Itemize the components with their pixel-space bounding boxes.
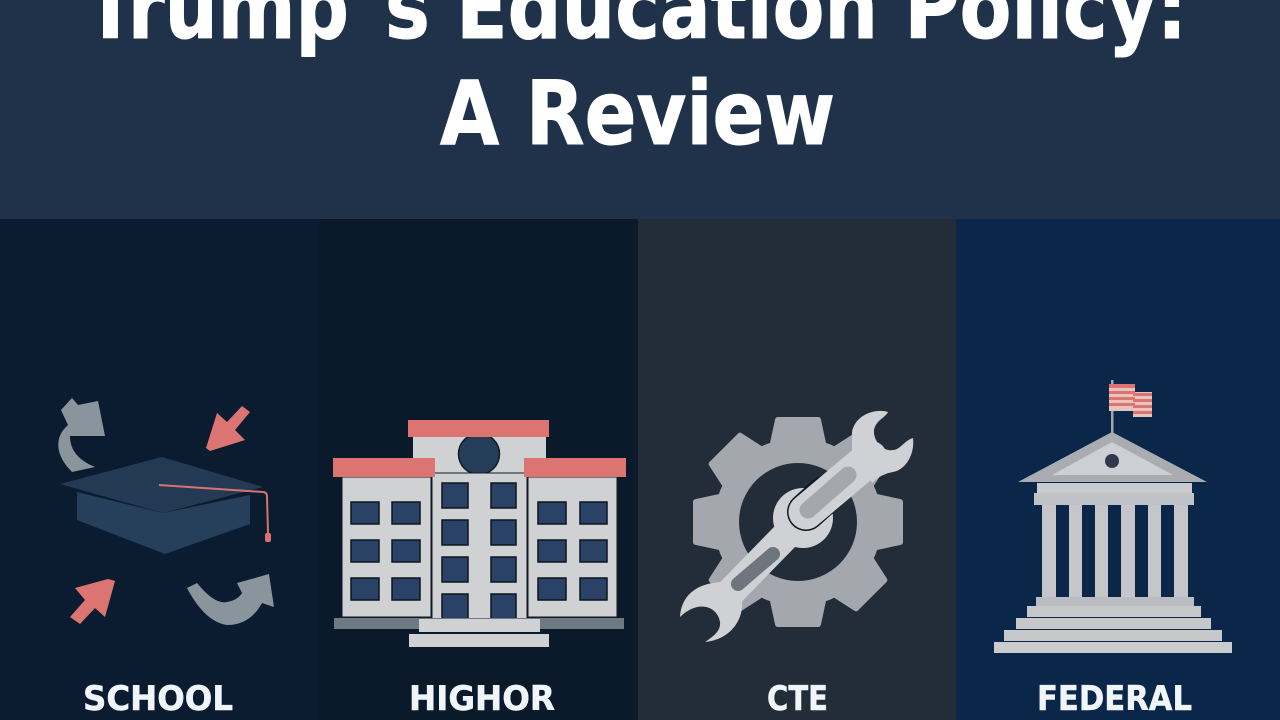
icon: university building bbox=[333, 420, 626, 647]
icon: government building bbox=[994, 432, 1232, 653]
panel: career and technical education bbox=[638, 219, 956, 720]
panel: higher education bbox=[319, 219, 638, 720]
icon: gray curved arrow bottom bbox=[187, 574, 274, 625]
label: cte: CTE bbox=[767, 679, 828, 719]
label: higher education: HIGHOR bbox=[409, 679, 555, 719]
title bbox=[85, 0, 1187, 165]
icon: gray curved arrow top bbox=[58, 398, 105, 472]
icon: flag on pole bbox=[1109, 380, 1152, 433]
icon: salmon arrow top bbox=[206, 406, 250, 451]
label: school: SCHOOL bbox=[83, 679, 233, 719]
icon: gear and wrench bbox=[680, 411, 913, 642]
icon: graduation cap bbox=[60, 457, 271, 554]
header band bbox=[0, 0, 1280, 219]
icon: salmon arrow bottom bbox=[70, 579, 115, 624]
label: federal: FEDERAL bbox=[1037, 679, 1192, 719]
panel: school bbox=[0, 219, 319, 720]
panel: federal bbox=[956, 219, 1280, 720]
title: A Review bbox=[440, 62, 835, 165]
